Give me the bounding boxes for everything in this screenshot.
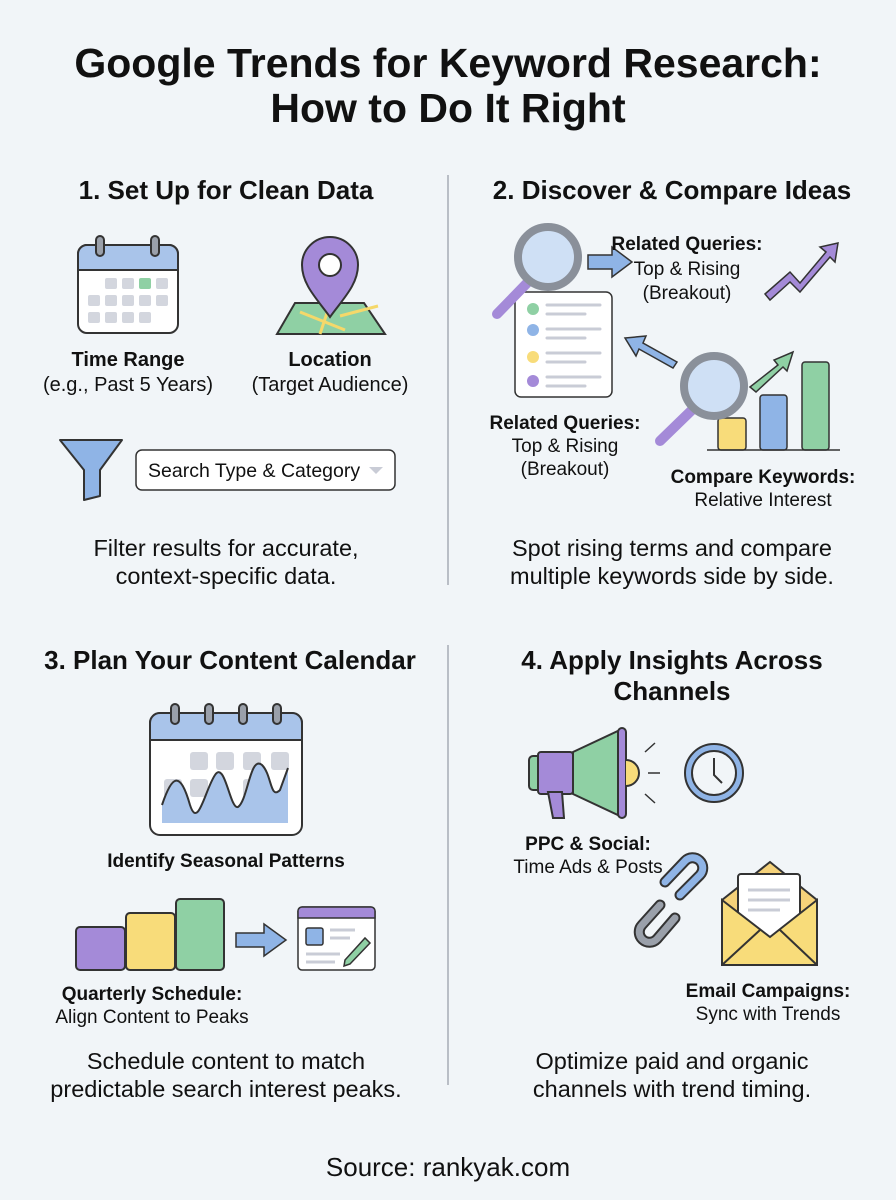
dropdown — [136, 450, 395, 490]
heading 4: Channels — [613, 676, 731, 706]
icon: calendar — [78, 236, 178, 333]
heading 2: 2. Discover & Compare Ideas — [493, 175, 851, 205]
caption 4 — [533, 1048, 811, 1102]
caption 3 — [50, 1048, 402, 1102]
icon: envelope — [722, 862, 817, 965]
panel: 4 apply — [513, 645, 850, 1102]
icon: bars — [76, 899, 224, 970]
label: ppc: PPC & Social: — [525, 834, 651, 855]
source: Source: rankyak.com — [326, 1152, 570, 1182]
label: compare keywords — [671, 467, 855, 511]
arrow up-left — [625, 336, 677, 368]
label: related queries bottom: Top & Rising — [512, 436, 618, 457]
caption 1 — [93, 535, 359, 589]
icon: magnifier 1 — [497, 227, 578, 314]
icon: funnel — [60, 440, 122, 500]
icon: seasonal calendar — [150, 704, 302, 835]
heading 1: 1. Set Up for Clean Data — [79, 175, 374, 205]
label: email: Sync with Trends — [696, 1004, 840, 1025]
icon: document list — [515, 292, 612, 397]
icon: chain link — [639, 858, 703, 942]
label: email — [686, 981, 850, 1025]
bar chart — [707, 352, 840, 450]
label: related queries bottom — [490, 413, 640, 480]
label: related queries top — [612, 234, 762, 304]
label: time range — [43, 349, 213, 396]
caption 3: predictable search interest peaks. — [50, 1076, 402, 1102]
label: ppc — [513, 834, 663, 878]
arrow right — [588, 247, 632, 277]
panel: 2 discover — [490, 175, 855, 589]
label: time range: Time Range — [72, 349, 184, 371]
label: compare keywords: Relative Interest — [694, 490, 832, 511]
icon: megaphone — [529, 728, 660, 818]
title: Google Trends for Keyword Research: — [74, 40, 822, 86]
icon: trend arrow — [765, 243, 838, 300]
label: seasonal: Identify Seasonal Patterns — [107, 851, 345, 872]
label: location: (Target Audience) — [252, 374, 408, 396]
icon: browser — [298, 907, 375, 970]
caption 2 — [510, 535, 834, 589]
label: time range: (e.g., Past 5 Years) — [43, 374, 213, 396]
label: related queries bottom: Related Queries: — [490, 413, 640, 434]
label: compare keywords: Compare Keywords: — [671, 467, 855, 488]
label: related queries top: Related Queries: — [612, 234, 762, 255]
caption 2: Spot rising terms and compare — [512, 535, 832, 561]
label: related queries top: Top & Rising — [634, 259, 740, 280]
caption 2: multiple keywords side by side. — [510, 563, 834, 589]
heading 4 — [521, 645, 823, 706]
caption 1: context-specific data. — [116, 563, 336, 589]
label: location: Location — [288, 349, 372, 371]
arrow — [236, 924, 286, 956]
caption 3: Schedule content to match — [87, 1048, 365, 1074]
label: quarterly — [55, 984, 249, 1028]
label: location — [252, 349, 408, 396]
title — [74, 40, 822, 131]
label: quarterly: Align Content to Peaks — [55, 1007, 249, 1028]
caption 1: Filter results for accurate, — [93, 535, 359, 561]
label: related queries bottom: (Breakout) — [521, 459, 609, 480]
label: quarterly: Quarterly Schedule: — [62, 984, 242, 1005]
caption 4: channels with trend timing. — [533, 1076, 811, 1102]
label: email: Email Campaigns: — [686, 981, 850, 1002]
title: How to Do It Right — [270, 85, 626, 131]
caption 4: Optimize paid and organic — [535, 1048, 809, 1074]
label: ppc: Time Ads & Posts — [513, 857, 663, 878]
panel: 3 plan — [44, 645, 416, 1102]
icon: clock — [685, 744, 743, 802]
heading 3: 3. Plan Your Content Calendar — [44, 645, 416, 675]
icon: map pin — [277, 237, 385, 334]
dropdown: Search Type & Category — [148, 460, 360, 482]
label: related queries top: (Breakout) — [643, 283, 731, 304]
heading 4: 4. Apply Insights Across — [521, 645, 823, 675]
icon: magnifier 2 — [660, 356, 744, 441]
panel: 1 set up — [43, 175, 408, 589]
